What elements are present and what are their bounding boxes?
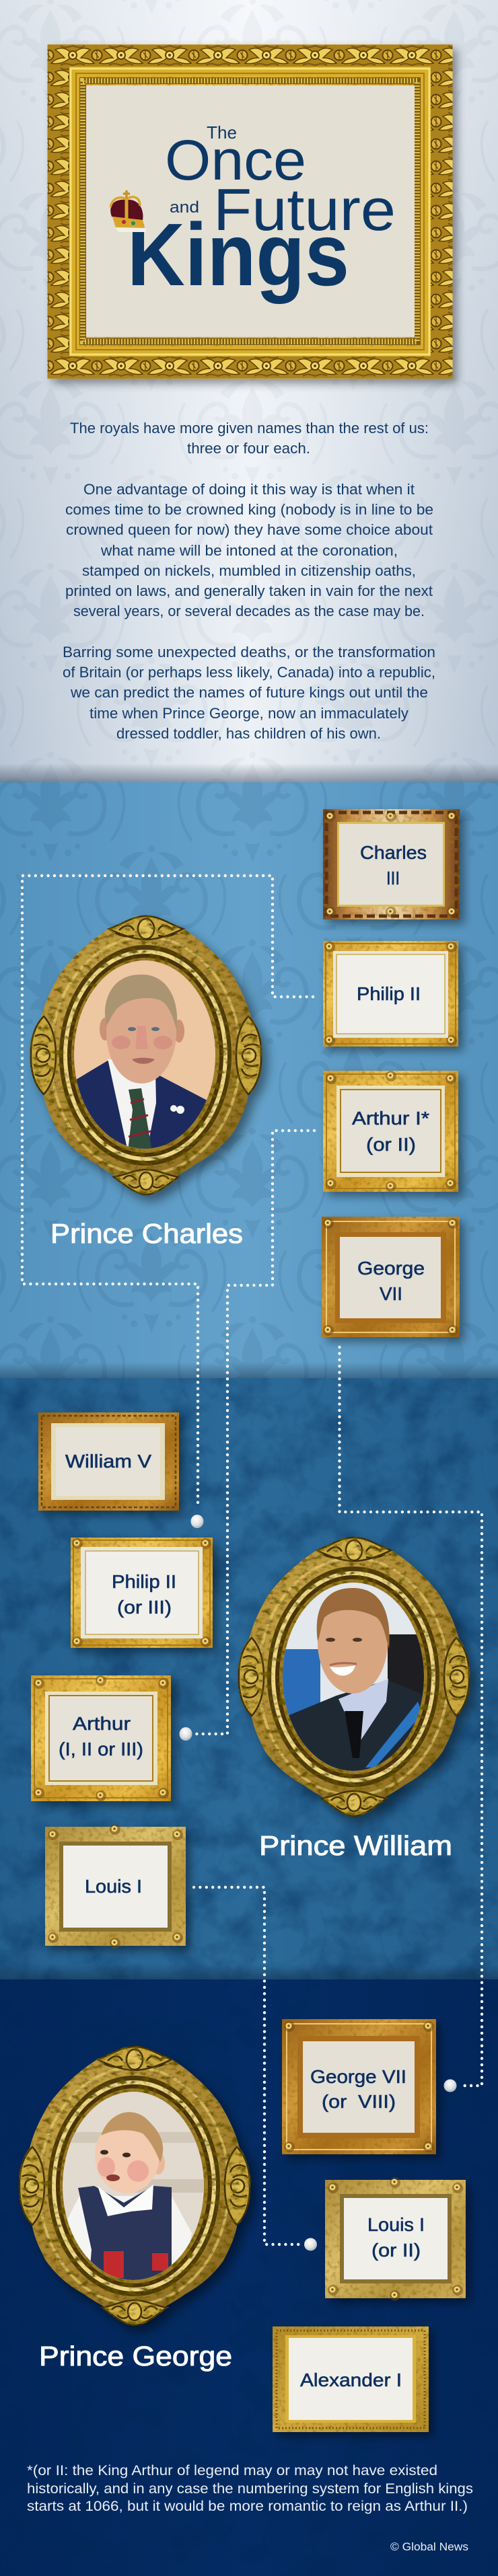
credit: © Global News [390, 2540, 468, 2553]
footnote [27, 2463, 473, 2514]
panel: Prince William background [0, 1378, 498, 1979]
label [352, 1108, 429, 1155]
intro text: of Britain (or perhaps less likely, Canada) into a republic, [63, 664, 435, 681]
frame: George VII [322, 1217, 460, 1337]
label [360, 842, 427, 888]
title text: The [207, 122, 237, 143]
label: Arthur I* [352, 1108, 429, 1129]
intro text: dressed toddler, has children of his own. [116, 725, 381, 742]
frame: Charles III [323, 809, 460, 919]
frame: Arthur I, II or III [31, 1675, 171, 1801]
intro text: three or four each. [187, 440, 310, 457]
label [367, 2214, 425, 2261]
intro text: Barring some unexpected deaths, or the transformation [63, 644, 435, 660]
panel: Prince George background [0, 1979, 498, 2576]
oval frame [20, 2047, 250, 2325]
title text: Future [213, 176, 396, 243]
label [310, 2066, 406, 2112]
label: William V [65, 1451, 151, 1472]
intro text: what name will be intoned at the coronation, [100, 542, 398, 559]
label: (or II) [366, 1134, 416, 1155]
label: George [357, 1258, 425, 1279]
intro text: One advantage of doing it this way is that when it [83, 481, 415, 498]
oval frame [31, 916, 261, 1195]
name: Prince Charles: Prince Charles [50, 1218, 243, 1249]
intro text: time when Prince George, now an immaculately [90, 705, 408, 722]
intro text [63, 420, 435, 742]
label: Louis I [85, 1876, 142, 1897]
connector: George VII to George VII or VIII [339, 1347, 482, 2086]
panel: Prince Charles background [0, 782, 498, 1378]
icon: crown [110, 190, 146, 232]
title mat [86, 85, 415, 337]
footnote: historically, and in any case the numbering system for English kings [27, 2481, 473, 2497]
intro text: printed on laws, and generally taken in vain for the next [65, 582, 433, 599]
portrait: Prince William [239, 1538, 469, 1816]
footnote: *(or II: the King Arthur of legend may or may not have existed [27, 2463, 437, 2478]
title text: and [170, 198, 199, 217]
intro text: comes time to be crowned king (nobody is in line to be [65, 501, 433, 518]
label: George VII [310, 2066, 406, 2087]
oval frame [239, 1538, 469, 1816]
portrait: Prince George [20, 2047, 250, 2325]
title text: Kings [127, 205, 349, 304]
title frame [48, 44, 452, 379]
pearl: Louis I or II [304, 2238, 317, 2250]
frame: George VII or VIII [282, 2019, 436, 2154]
label: (or III) [117, 1597, 172, 1618]
name: Prince George: Prince George [39, 2341, 232, 2372]
name: Prince William: Prince William [259, 1830, 452, 1861]
label: (or II) [371, 2240, 421, 2261]
pearl: Arthur [179, 1727, 192, 1741]
frame: Louis I or II [325, 2177, 466, 2301]
intro text: The royals have more given names than the rest of us: [70, 420, 429, 437]
frame: Philip II [323, 941, 458, 1047]
frame: Arthur I or II [323, 1071, 458, 1192]
photo [61, 2088, 209, 2283]
label: Louis I [367, 2214, 425, 2235]
panel: intro background [0, 0, 498, 782]
photo [279, 1581, 427, 1776]
frame: Philip II or III [71, 1538, 213, 1648]
title text [127, 122, 396, 304]
frame: Alexander I [273, 2326, 429, 2432]
label: Charles [360, 842, 427, 863]
label [357, 1258, 425, 1304]
label: Philip II [112, 1571, 176, 1592]
frame: William V [38, 1412, 179, 1511]
pearl: William V [191, 1515, 203, 1528]
photo [71, 955, 219, 1153]
label [112, 1571, 176, 1618]
pearl: George VII or VIII [444, 2080, 456, 2092]
connector: Louis I to Louis I or II [194, 1887, 299, 2244]
label: Philip II [357, 983, 421, 1004]
footnote: starts at 1066, but it would be more romantic to reign as Arthur II.) [27, 2499, 468, 2514]
label [59, 1713, 143, 1759]
connector: Charles to William V and Philip II [22, 876, 313, 1509]
intro text: we can predict the names of future kings out until the [70, 684, 428, 701]
label: Alexander I [300, 2370, 402, 2390]
label: III [386, 868, 400, 888]
title text: Once [165, 128, 306, 192]
portrait: Prince Charles [31, 916, 261, 1195]
connector: Arthur I to Arthur [194, 1131, 314, 1734]
intro text: crowned queen for now) they have some choice about [66, 521, 433, 538]
intro text: several years, or several decades as the case may be. [73, 603, 425, 619]
label: Arthur [73, 1713, 131, 1734]
intro text: stamped on nickels, mumbled in citizenship oaths, [82, 562, 416, 579]
label: (I, II or III) [59, 1739, 143, 1759]
label: (or VIII) [322, 2091, 396, 2112]
frame: Louis I [45, 1824, 186, 1948]
label: VII [380, 1283, 402, 1304]
